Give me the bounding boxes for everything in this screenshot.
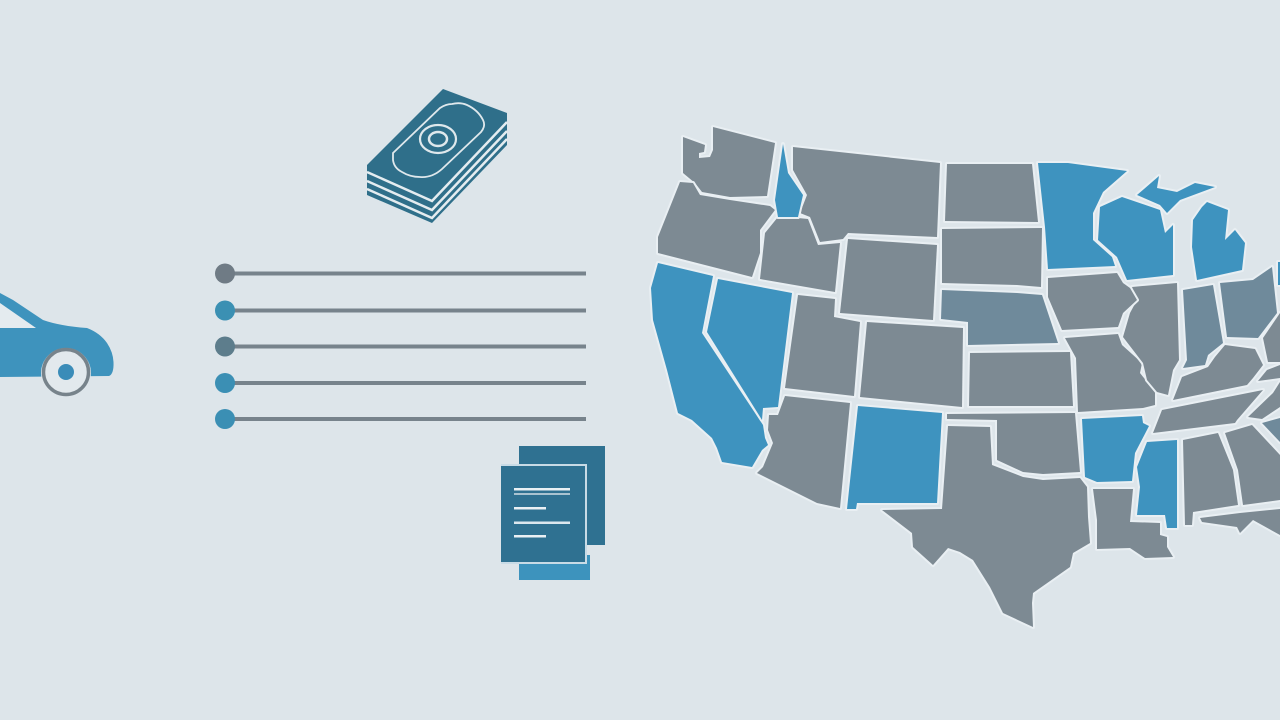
list row 2 <box>215 300 586 320</box>
icon: stack of money <box>367 89 507 223</box>
list row 5 <box>215 409 586 429</box>
list row 4 <box>215 373 586 393</box>
US map <box>651 127 1280 627</box>
icon: car <box>0 293 114 398</box>
states: highlighted blue <box>651 144 1280 528</box>
states: muted blue-gray <box>941 267 1280 442</box>
icon: documents <box>501 446 605 580</box>
states: gray <box>658 127 1280 627</box>
bullet list placeholder lines <box>215 264 586 429</box>
list row 3 <box>215 336 586 356</box>
list row 1 <box>215 264 586 284</box>
